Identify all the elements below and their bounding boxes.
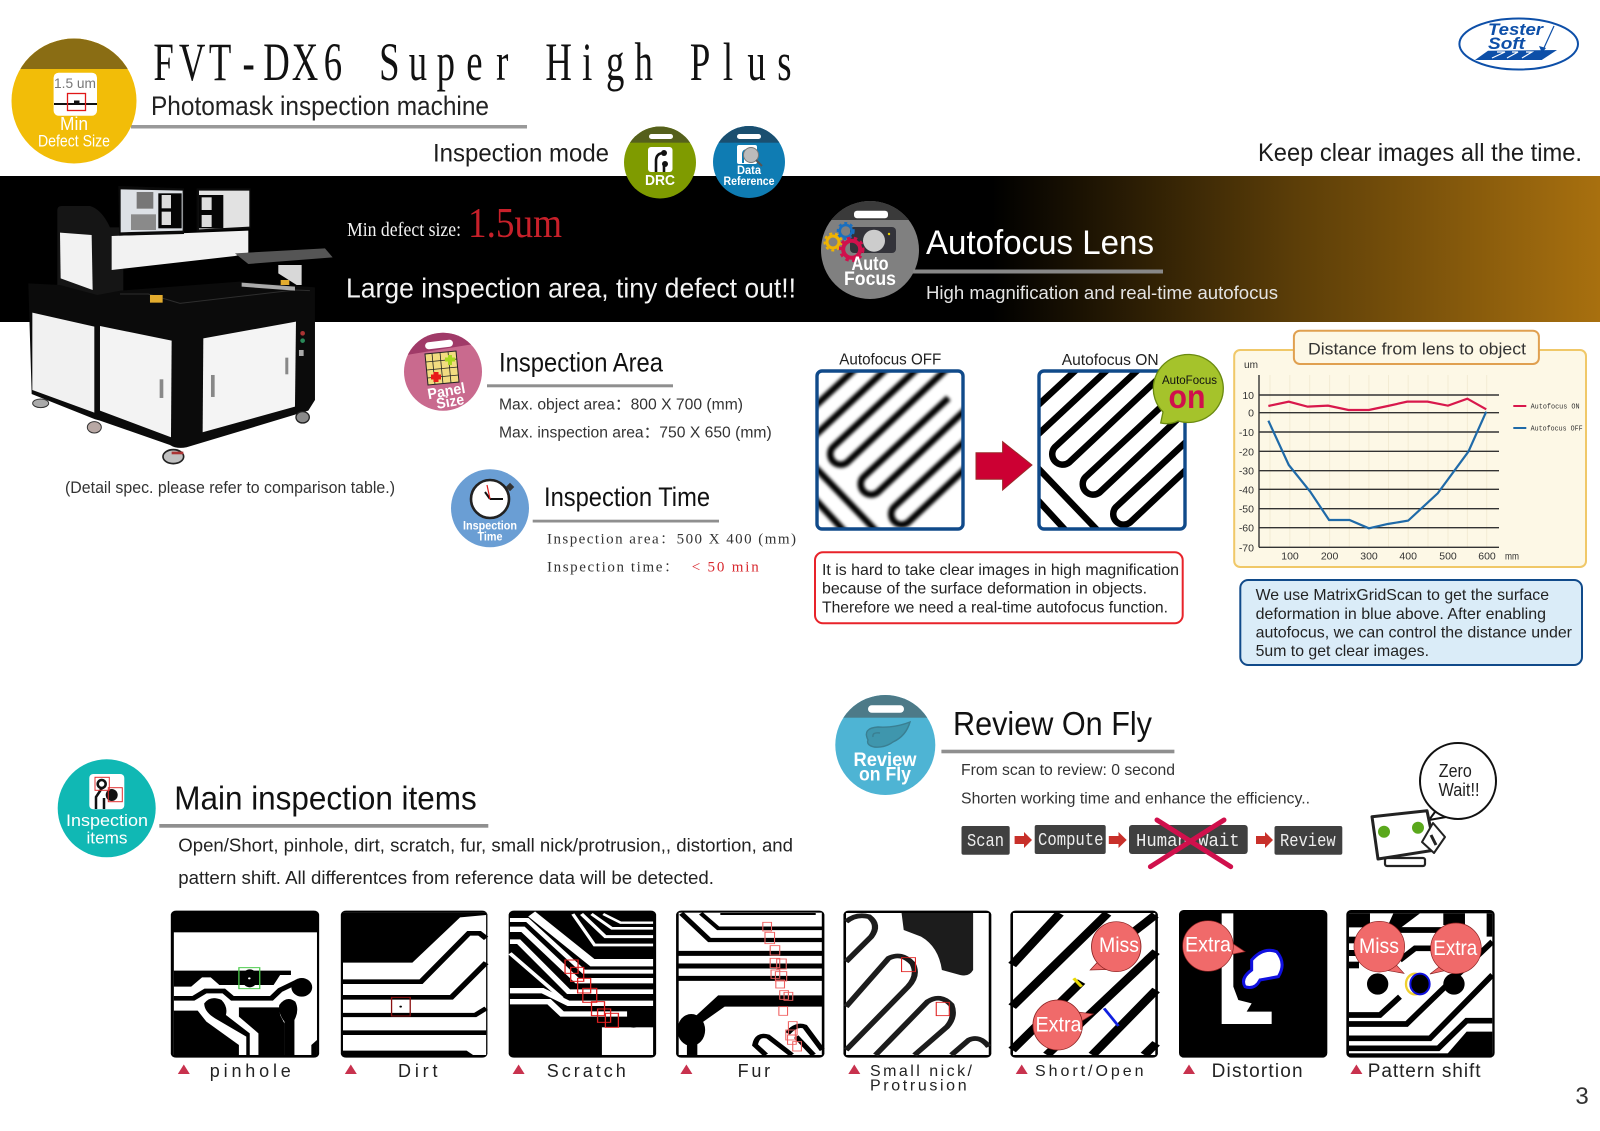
chart axis labels: -70 xyxy=(1239,542,1254,554)
callout: MatrixGridScan explanation: We use MatrixGridScan to get the surface xyxy=(1256,587,1549,604)
step: scan xyxy=(962,826,1010,855)
badge: autofocus on bubble: AutoFocus xyxy=(1162,373,1217,387)
icon: auto focus badge: Auto xyxy=(852,254,888,275)
thumbnail: distortion xyxy=(1179,910,1327,1082)
panel: autofocus off sample xyxy=(815,353,965,531)
thumbnail: scratch xyxy=(509,911,656,1081)
icon: min defect size badge xyxy=(12,38,136,164)
thumbnail: distortion: Extra xyxy=(1185,934,1231,957)
banner text: min defect size: Min defect size: xyxy=(347,219,461,241)
badge: autofocus on bubble xyxy=(1153,355,1223,424)
panel: autofocus off sample: Autofocus OFF xyxy=(839,351,941,368)
chart axis labels: 0 xyxy=(1248,408,1254,420)
section: inspection area: Max. inspection area：750 X 650 (mm) xyxy=(499,424,772,441)
callout: why autofocus xyxy=(815,552,1183,623)
header: product title xyxy=(131,32,792,129)
icon: inspection items badge xyxy=(58,759,156,857)
callout: MatrixGridScan explanation: deformation in blue above. After enabling xyxy=(1256,606,1546,623)
section: inspection time: Inspection time： xyxy=(547,560,679,576)
logo: Tester Soft: Tester xyxy=(1488,20,1544,39)
header: product title: FVT-DX6 Super High Plus xyxy=(153,32,792,92)
illustration: robot with zero wait speech bubble xyxy=(1372,743,1496,866)
chart axis labels: 10 xyxy=(1242,390,1254,402)
icon: inspection items badge: Inspection xyxy=(66,811,148,830)
icon: data reference mode badge: Data xyxy=(737,163,761,177)
badge: autofocus on bubble: on xyxy=(1168,378,1206,415)
step: compute xyxy=(1035,825,1106,854)
section: inspection time: < 50 min xyxy=(692,560,759,576)
icon: inspection time badge: Inspection xyxy=(463,520,517,532)
panel: autofocus on sample: Autofocus ON xyxy=(1062,352,1159,369)
arrow: human wait to review xyxy=(1256,832,1273,848)
callout: why autofocus: Therefore we need a real-time autofocus function. xyxy=(822,599,1168,616)
tower white panel xyxy=(60,233,93,290)
section: inspection area xyxy=(487,348,772,441)
thumbnail: small nick and protrusion: Small nick/ xyxy=(870,1063,973,1080)
callout: why autofocus: because of the surface deformation in objects. xyxy=(822,580,1147,597)
chart: distance from lens to object xyxy=(1234,331,1586,567)
keyboard arm xyxy=(278,265,302,285)
chart legend: Autofocus ON xyxy=(1531,404,1580,412)
thumbnail: pattern shift: Pattern shift xyxy=(1368,1061,1481,1082)
icon: min defect size badge: Defect Size xyxy=(38,132,110,151)
keyboard xyxy=(235,248,333,264)
icon: auto focus badge xyxy=(820,200,920,299)
section: main inspection items: Main inspection items xyxy=(174,779,477,816)
icon: review on fly badge: on Fly xyxy=(859,765,911,786)
chart legend xyxy=(1513,404,1583,434)
thumbnail: pattern shift: Miss xyxy=(1359,935,1399,958)
section: inspection time: Inspection area：500 X 400 (mm) xyxy=(547,531,796,547)
step: review: Review xyxy=(1280,832,1336,852)
chart axis labels: -40 xyxy=(1239,484,1254,496)
chart legend: Autofocus OFF xyxy=(1531,426,1583,434)
banner text: tagline: Large inspection area, tiny defect out!! xyxy=(346,273,796,304)
section: review on fly: From scan to review: 0 second xyxy=(961,762,1175,779)
callout: MatrixGridScan explanation: 5um to get clear images. xyxy=(1256,643,1429,660)
step: review xyxy=(1274,826,1342,855)
center cabinet panel xyxy=(100,326,172,437)
icon: panel size badge: Panel xyxy=(426,380,467,403)
banner text: min defect size: 1.5um xyxy=(468,201,562,247)
panel: autofocus on sample xyxy=(1037,354,1187,531)
chart axis labels: um xyxy=(1244,359,1258,371)
icon: review on fly badge xyxy=(835,695,936,795)
speech bubble xyxy=(1420,743,1496,820)
section: main inspection items: Open/Short, pinhole, dirt, scratch, fur, small nick/protrusion,, distortion, and xyxy=(178,836,793,856)
icon: panel size badge: Size xyxy=(435,391,466,413)
step: compute: Compute xyxy=(1038,831,1104,851)
banner text: min defect size xyxy=(347,201,562,247)
machine top deck edge highlight xyxy=(120,290,310,303)
illustration: inspection machine xyxy=(28,186,333,464)
thumbnail: short and open xyxy=(1010,911,1158,1080)
icon: data reference mode badge: Reference xyxy=(724,174,775,188)
thumbnail: distortion: Distortion xyxy=(1212,1061,1303,1082)
thumbnail: pattern shift: Extra xyxy=(1433,937,1478,960)
chart axis labels: -50 xyxy=(1239,504,1254,516)
thumbnail: short and open: Short/Open xyxy=(1035,1063,1144,1080)
chart gridlines xyxy=(1259,375,1499,547)
black to amber banner xyxy=(0,176,1600,322)
section: inspection area: Max. object area：800 X 700 (mm) xyxy=(499,396,743,413)
arrow: compute to human wait xyxy=(1109,832,1127,848)
header: product title: Photomask inspection machine xyxy=(151,91,489,121)
icon: auto focus badge: Focus xyxy=(844,269,896,290)
chart axis labels: -20 xyxy=(1239,446,1254,458)
chart axis labels: -30 xyxy=(1239,466,1254,478)
icon: min defect size badge: 1.5 um xyxy=(54,76,96,91)
robot xyxy=(1372,811,1445,866)
icon: min defect size badge: Min xyxy=(60,114,88,134)
thumbnail: small nick and protrusion xyxy=(843,911,991,1095)
step: human wait crossed out xyxy=(1129,820,1248,867)
thumbnail: dirt xyxy=(341,911,487,1081)
section: main inspection items xyxy=(159,779,793,888)
chart panel background xyxy=(1234,350,1586,567)
chart axis labels: mm xyxy=(1505,550,1519,562)
monitor one xyxy=(118,186,184,236)
icon: DRC mode badge: DRC xyxy=(645,173,675,189)
thumbnail: short and open: Miss xyxy=(1099,934,1139,957)
chart axis labels: 100 xyxy=(1281,550,1299,562)
arrow: scan to compute xyxy=(1015,832,1032,848)
section: inspection time xyxy=(533,482,796,576)
icon: inspection time badge: Time xyxy=(478,531,502,543)
control panel buttons xyxy=(299,331,305,356)
thumbnail: dirt: Dirt xyxy=(398,1061,438,1081)
icon: review on fly badge: Review xyxy=(854,750,917,771)
page number: 3 xyxy=(1575,1083,1589,1110)
chart axis labels: 200 xyxy=(1321,550,1339,562)
line: autofocus off xyxy=(1268,412,1486,528)
machine rear tower xyxy=(57,206,123,303)
section: review on fly xyxy=(941,705,1310,807)
monitor two xyxy=(197,188,251,232)
logo: Tester Soft: Soft xyxy=(1488,34,1526,53)
section: inspection time: Inspection Time xyxy=(544,482,710,512)
gantry white plate xyxy=(112,231,248,270)
speech bubble: Wait!! xyxy=(1438,780,1480,800)
callout: MatrixGridScan explanation xyxy=(1240,580,1582,665)
line: autofocus on xyxy=(1268,399,1486,410)
chart axis labels: -60 xyxy=(1239,523,1254,535)
machine base frame xyxy=(28,282,315,448)
rear gray rail xyxy=(242,283,295,291)
section: main inspection items: pattern shift. All differentces from reference data will be detected. xyxy=(178,868,714,888)
chart axis labels: 300 xyxy=(1360,550,1378,562)
thumbnail: small nick and protrusion: Protrusion xyxy=(870,1078,967,1095)
thumbnail: scratch: Scratch xyxy=(547,1061,626,1081)
tagline: keep clear images: Keep clear images all the time. xyxy=(1258,139,1582,167)
icon: data reference mode badge xyxy=(713,126,785,198)
chart axis labels xyxy=(1239,359,1519,562)
thumbnail: pinhole xyxy=(171,911,319,1081)
logo: Tester Soft xyxy=(1459,18,1578,70)
flow: scan to review xyxy=(962,820,1342,867)
icon: inspection items badge: items xyxy=(86,828,128,847)
step: human wait crossed out: Human Wait xyxy=(1136,832,1240,852)
icon: DRC mode badge xyxy=(624,126,696,198)
section: review on fly: Shorten working time and enhance the efficiency.. xyxy=(961,790,1310,807)
chart title: Distance from lens to object xyxy=(1308,339,1526,358)
chart axis labels: -10 xyxy=(1239,427,1254,439)
speech bubble: Zero xyxy=(1439,761,1472,781)
left cabinet panel xyxy=(32,313,94,413)
section: inspection area: Inspection Area xyxy=(499,348,664,378)
thumbnail: fur xyxy=(676,911,824,1081)
icon: panel size badge xyxy=(404,332,482,411)
section: review on fly: Review On Fly xyxy=(953,705,1152,742)
thumbnail: pinhole: pinhole xyxy=(210,1061,291,1081)
icon: inspection time badge xyxy=(451,469,529,547)
yellow clamps xyxy=(150,280,289,303)
inspection mode label: Inspection mode xyxy=(433,140,609,168)
heading: autofocus lens xyxy=(913,224,1278,303)
chart axis labels: 500 xyxy=(1439,550,1457,562)
chart title xyxy=(1294,331,1539,364)
chart axis labels: 600 xyxy=(1478,550,1496,562)
arrow: off to on xyxy=(976,442,1032,490)
machine note: (Detail spec. please refer to comparison table.) xyxy=(65,479,395,497)
right cabinet panel xyxy=(203,322,296,432)
cabinet handles xyxy=(160,358,288,398)
chart axis labels: 400 xyxy=(1399,550,1417,562)
callout: MatrixGridScan explanation: autofocus, we can control the distance under xyxy=(1256,624,1573,641)
step: scan: Scan xyxy=(967,832,1004,852)
heading: autofocus lens: Autofocus Lens xyxy=(926,224,1154,262)
thumbnail: short and open: Extra xyxy=(1036,1014,1082,1037)
callout: why autofocus: It is hard to take clear images in high magnification xyxy=(822,562,1179,579)
casters xyxy=(33,399,309,464)
thumbnail: pattern shift xyxy=(1346,910,1495,1082)
heading: autofocus lens: High magnification and real-time autofocus xyxy=(926,282,1278,303)
thumbnail: fur: Fur xyxy=(738,1061,770,1081)
